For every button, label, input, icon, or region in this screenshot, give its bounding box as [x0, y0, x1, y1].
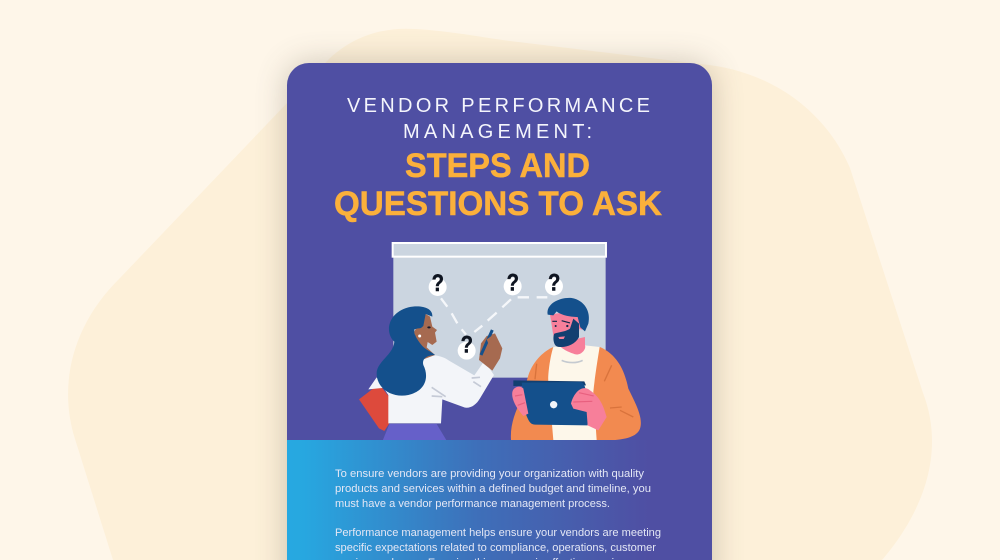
- body text: specific expectations related to compliance, operations, customer: [335, 542, 656, 554]
- question mark nodes: ?: [432, 270, 444, 297]
- question mark nodes: ?: [461, 331, 473, 358]
- question mark nodes: ?: [548, 269, 560, 296]
- hair: [547, 298, 589, 331]
- neck: [560, 337, 585, 354]
- body text: To ensure vendors are providing your organization with quality: [335, 468, 644, 480]
- red folder: [359, 384, 389, 431]
- heading: vendor performance management: VENDOR PERFORMANCE: [347, 95, 650, 117]
- body text: must have a vendor performance management process.: [335, 498, 610, 510]
- heading: vendor performance management: MANAGEMENT:: [403, 121, 592, 143]
- illustration: vendor review at whiteboard: [359, 243, 641, 441]
- question mark nodes: ?: [507, 269, 519, 296]
- man with tablet: [511, 298, 641, 440]
- heading: steps and questions to ask: STEPS AND: [405, 147, 590, 185]
- body text: Performance management helps ensure your vendors are meeting: [335, 527, 661, 539]
- whiteboard: [393, 243, 606, 378]
- skin: [414, 312, 437, 359]
- body text: [335, 468, 661, 560]
- skirt: [383, 424, 447, 441]
- beard: [553, 319, 579, 347]
- woman with marker: [359, 306, 502, 441]
- cardigan: [511, 347, 641, 440]
- hands: [512, 387, 528, 416]
- whiteboard and question network: [393, 243, 606, 378]
- shirt creases: [432, 377, 481, 397]
- dashed connectors: [441, 297, 547, 335]
- body text: products and services within a defined budget and timeline, you: [335, 483, 651, 495]
- face: [550, 310, 580, 347]
- intro section gradient: [287, 440, 660, 560]
- shirt: [368, 355, 494, 423]
- heading: vendor performance management: [347, 98, 650, 138]
- tablet: [513, 380, 586, 386]
- heading: steps and questions to ask: [334, 147, 662, 223]
- card shadow: [287, 63, 712, 560]
- hand and marker: [479, 333, 502, 371]
- hair: [377, 306, 435, 396]
- heading: steps and questions to ask: QUESTIONS TO ASK: [334, 185, 662, 223]
- question mark nodes: [429, 269, 563, 360]
- panel: infographic card: [287, 63, 712, 560]
- shirt: [548, 345, 600, 440]
